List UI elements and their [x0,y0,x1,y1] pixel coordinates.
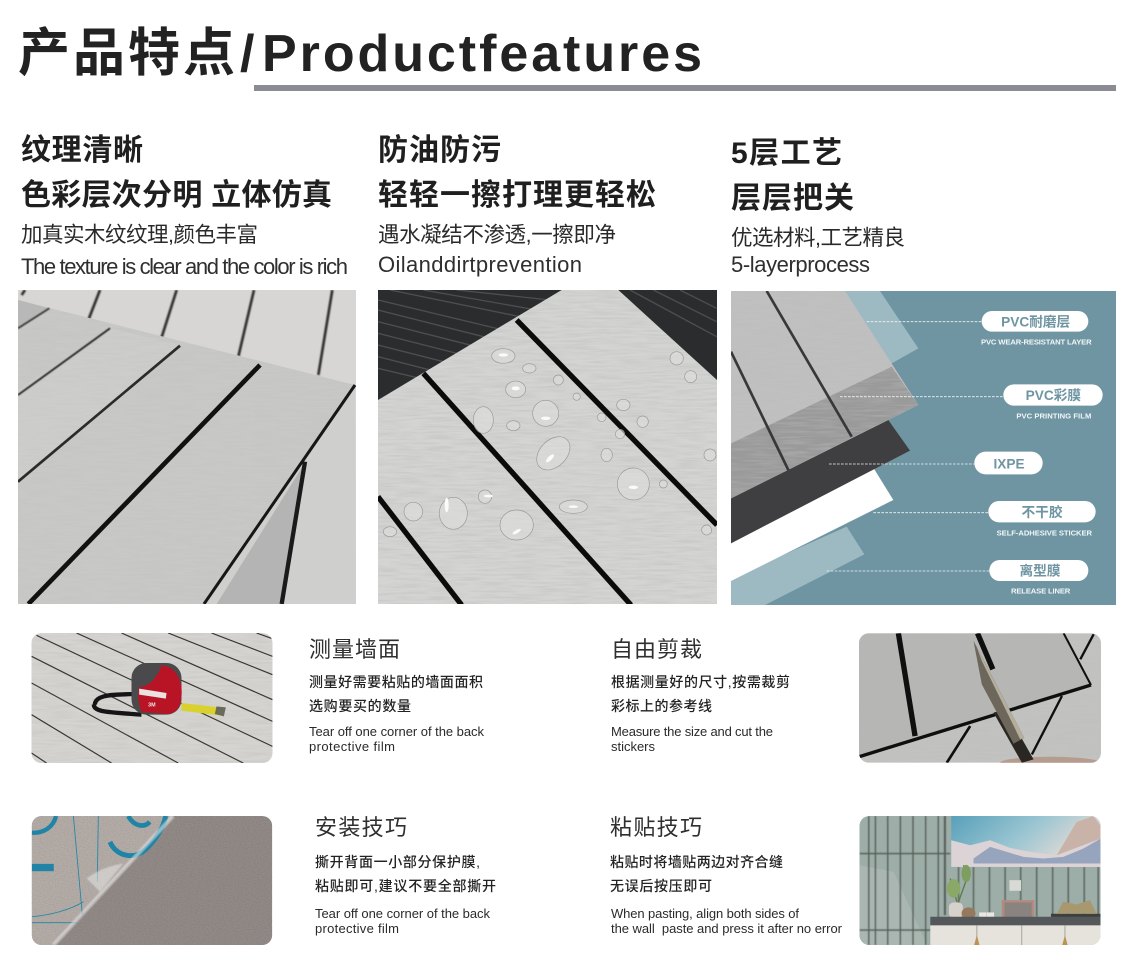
heading: clear texture [21,134,332,212]
text: clear texture description: 加真实木纹纹理,颜色丰富 [21,223,258,247]
text block: pasting tips: 粘贴时将墙贴两边对齐合缝 [610,854,783,870]
layer: PVC wear-resistant film [845,291,918,368]
label: self-adhesive sticker: 不干胶 [1022,504,1063,520]
heading: 5-layer process: 5层工艺 [731,137,842,170]
photo: scissors cutting panel [859,633,1101,763]
panel: water droplets photo [378,290,717,604]
text block: free cutting [611,637,790,754]
text block: measure the wall: 选购要买的数量 [309,698,411,714]
text block: free cutting: 自由剪裁 [611,637,702,662]
text block: installation tips: protective film [315,921,399,936]
text block: pasting tips: 粘贴技巧 [610,815,702,840]
text: 5-layer description [731,226,905,277]
text block: measure the wall [309,637,484,754]
label: PVC wear-resistant layer: PVC耐磨层 [1001,313,1070,329]
label: release liner: 离型膜 [1020,563,1061,579]
cabinet [930,917,1101,945]
heading: clear texture: 色彩层次分明 立体仿真 [21,179,332,212]
heading: clear texture: 纹理清晰 [21,134,143,167]
layer: IXPE foam [731,420,910,543]
text: oil and dirt description: Oilanddirtprevention [378,252,582,277]
label: IXPE [974,452,1043,474]
text block: installation tips: 撕开背面一小部分保护膜, [315,854,480,870]
label: PVC wear-resistant layer: PVC WEAR-RESISTANT LAYER [981,338,1092,347]
photo: finished wall interior [860,816,1100,945]
label: release liner [989,560,1088,596]
shelf with plant and decor [947,865,1101,920]
text: oil and dirt description: 遇水凝结不渗透,一擦即净 [378,223,616,247]
label: release liner: RELEASE LINER [1011,587,1071,596]
title: Productfeatures [262,25,702,83]
water droplets [383,349,716,540]
text: 5-layer description: 优选材料,工艺精良 [731,226,905,250]
heading: 5-layer process [731,137,854,215]
text block: installation tips: 粘贴即可,建议不要全部撕开 [315,878,496,894]
text: clear texture description: The texture is clear and the color is rich [21,254,348,279]
text block: measure the wall: protective film [309,739,395,754]
photo: tape measure on wood panel [32,633,272,763]
layer: PVC printing film and wood surface [731,291,921,501]
text block: pasting tips: When pasting, align both sides of [611,906,799,921]
label: self-adhesive sticker [988,501,1096,537]
painting [951,816,1101,867]
text block: installation tips: 安装技巧 [315,815,407,840]
label: IXPE: IXPE [993,456,1025,471]
icon: scissors and hand [973,641,1100,769]
layer: release liner [731,527,864,605]
text block: pasting tips: the wall paste and press it after no error [611,921,843,936]
text block: pasting tips [610,815,843,936]
text block: installation tips: Tear off one corner of the back [315,906,490,921]
icon: tape measure [94,663,226,716]
film marks [32,816,166,923]
heading: oil and dirt proof: 轻轻一擦打理更轻松 [378,179,656,212]
text: clear texture description [21,223,348,279]
icon: tape measure: 3M [148,702,156,708]
heading: oil and dirt proof: 防油防污 [378,134,501,167]
dashed leader lines [827,322,1003,571]
title: / [240,25,254,83]
text block: measure the wall: 测量墙面 [309,637,400,662]
panel: wood texture photo [18,290,356,604]
text block: free cutting: stickers [611,739,656,754]
text: 5-layer description: 5-layerprocess [731,252,870,277]
text block: free cutting: 根据测量好的尺寸,按需裁剪 [611,674,790,690]
text block: pasting tips: 无误后按压即可 [610,878,712,894]
text block: measure the wall: Tear off one corner of the back [309,724,484,739]
text: oil and dirt description [378,223,616,277]
heading: oil and dirt proof [378,134,656,212]
label: PVC printing film [1003,384,1103,421]
text block: free cutting: 彩标上的参考线 [611,698,712,714]
title [18,25,702,83]
photo: peeling protective film [32,816,272,945]
panel: 5-layer diagram [731,291,1116,605]
text block: measure the wall: 测量好需要粘贴的墙面面积 [309,674,483,690]
layer: self-adhesive sticker [731,465,893,581]
label: self-adhesive sticker: SELF-ADHESIVE STICKER [997,528,1092,537]
title: 产品特点 [18,25,235,83]
heading: 5-layer process: 层层把关 [731,182,854,215]
text block: free cutting: Measure the size and cut the [611,724,773,739]
label: PVC printing film: PVC PRINTING FILM [1016,412,1091,421]
label: PVC wear-resistant layer [981,311,1092,347]
label: PVC printing film: PVC彩膜 [1026,387,1081,403]
text block: installation tips [315,815,496,936]
